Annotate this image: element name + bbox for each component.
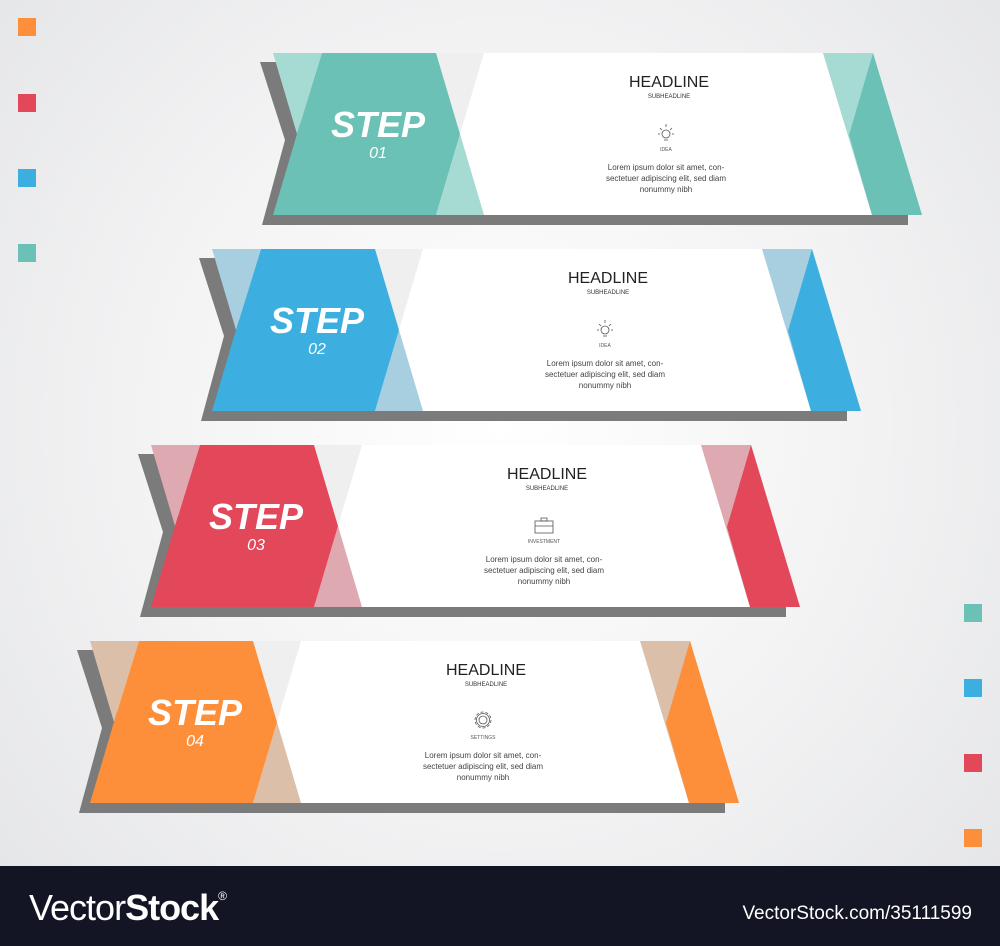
decorative squares left <box>18 18 36 262</box>
body text: nonummy nibh <box>457 773 509 782</box>
step 01 banner: IDEA <box>660 147 672 153</box>
step 03 banner <box>138 445 800 617</box>
icon: idea <box>597 320 613 336</box>
step 01 banner <box>260 53 922 225</box>
body text: Lorem ipsum dolor sit amet, con- <box>608 163 725 172</box>
body text: Lorem ipsum dolor sit amet, con- <box>486 555 603 564</box>
body text: sectetuer adipiscing elit, sed diam <box>484 566 604 575</box>
icon: briefcase <box>535 518 553 533</box>
headline: HEADLINE <box>507 466 587 483</box>
icon: gear <box>475 712 491 728</box>
body text: sectetuer adipiscing elit, sed diam <box>545 370 665 379</box>
body text: sectetuer adipiscing elit, sed diam <box>606 174 726 183</box>
headline: HEADLINE <box>446 662 526 679</box>
step 03 banner: SUBHEADLINE <box>526 486 568 492</box>
footer bar <box>0 866 1000 946</box>
footer logo: ® <box>218 889 227 903</box>
footer logo: VectorStock <box>29 887 218 928</box>
step label: STEP <box>209 496 304 537</box>
headline: HEADLINE <box>629 74 709 91</box>
step 03 banner: 03 <box>247 537 265 554</box>
body text: nonummy nibh <box>518 577 570 586</box>
footer url: VectorStock.com/35111599 <box>742 903 972 924</box>
step 04 banner: SETTINGS <box>470 735 496 741</box>
icon: idea <box>658 124 674 140</box>
step label: STEP <box>148 692 243 733</box>
step 02 banner: 02 <box>308 341 326 358</box>
step label: STEP <box>331 104 426 145</box>
step 01 banner: 01 <box>369 145 387 162</box>
step label: STEP <box>270 300 365 341</box>
decorative squares right <box>964 604 982 847</box>
step 02 banner <box>199 249 861 421</box>
step 02 banner: IDEA <box>599 343 611 349</box>
step 04 banner <box>77 641 739 813</box>
body text: nonummy nibh <box>579 381 631 390</box>
body text: nonummy nibh <box>640 185 692 194</box>
headline: HEADLINE <box>568 270 648 287</box>
step 01 banner: SUBHEADLINE <box>648 94 690 100</box>
body text: sectetuer adipiscing elit, sed diam <box>423 762 543 771</box>
step 04 banner: SUBHEADLINE <box>465 682 507 688</box>
step 04 banner: 04 <box>186 733 204 750</box>
step 02 banner: SUBHEADLINE <box>587 290 629 296</box>
body text: Lorem ipsum dolor sit amet, con- <box>547 359 664 368</box>
step 03 banner: INVESTMENT <box>528 539 560 545</box>
body text: Lorem ipsum dolor sit amet, con- <box>425 751 542 760</box>
